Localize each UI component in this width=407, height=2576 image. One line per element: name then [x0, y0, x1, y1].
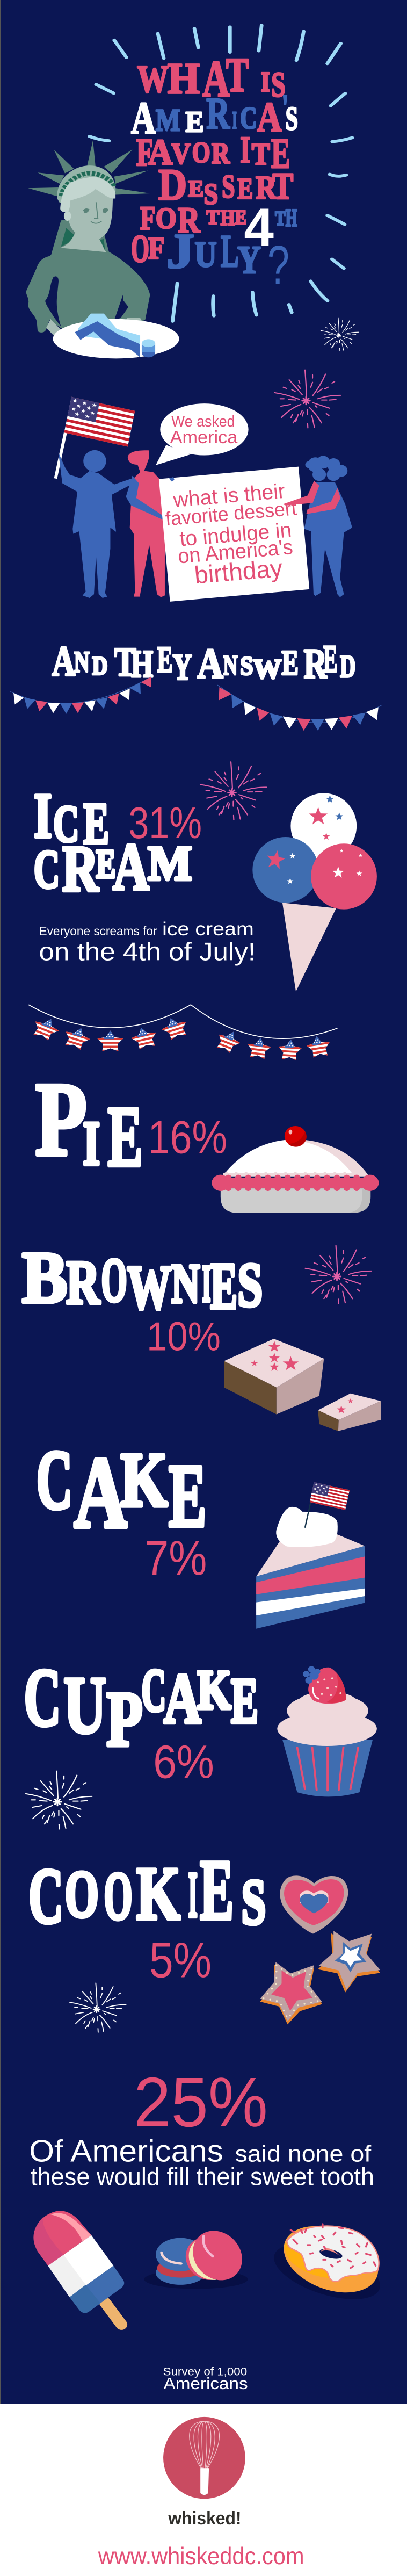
heading: pie: I — [83, 1109, 100, 1178]
panel: pie and brownies — [22, 1061, 381, 1431]
heading: brownies: B — [22, 1236, 68, 1318]
title: R — [256, 169, 277, 206]
burst rays around title — [90, 25, 352, 321]
heading: ice cream: A — [113, 829, 149, 904]
icon: macarons — [144, 2223, 252, 2289]
heading: cupcake: U — [63, 1661, 106, 1750]
heading: cupcake: K — [197, 1659, 231, 1721]
heading: ice cream: C — [53, 795, 79, 853]
heading: pie: E — [108, 1089, 143, 1185]
heading: cupcake: C — [24, 1651, 61, 1743]
bunting: right — [217, 685, 382, 731]
heading: cupcake: C — [141, 1656, 166, 1724]
heading: pie: P — [35, 1061, 87, 1178]
icon: pink firework — [200, 762, 266, 820]
icon: popsicle — [33, 2211, 124, 2325]
title: L — [221, 226, 239, 277]
title: W — [137, 57, 169, 101]
heading: cookies: I — [188, 1859, 198, 1931]
icon: white firework — [26, 1771, 92, 1829]
heading: and they answered: D — [340, 649, 355, 684]
title: I — [240, 128, 250, 171]
caption — [39, 919, 256, 966]
icon: cookies — [260, 1875, 380, 2024]
logo: whisked — [163, 2417, 245, 2529]
heading: cake: K — [121, 1437, 168, 1522]
heading: cake — [37, 1433, 206, 1549]
title: M — [156, 103, 180, 138]
stat: 25%: 25% — [134, 2063, 268, 2141]
heading: cookies: K — [136, 1851, 180, 1936]
heading: ice cream: I — [34, 781, 52, 851]
title: O — [192, 136, 210, 169]
title: T — [226, 48, 249, 102]
icon: white firework — [70, 1983, 126, 2032]
text: survey note: Americans — [164, 2374, 248, 2393]
heading: and they answered: N — [223, 650, 237, 681]
heading: cookies: C — [28, 1852, 63, 1940]
title: ? — [267, 234, 289, 295]
icon: statue of liberty with dessert plate — [26, 140, 179, 358]
sign text: favorite dessert — [164, 497, 298, 530]
title: S — [286, 100, 298, 136]
icon: cake slice — [256, 1482, 365, 1629]
title: E — [271, 129, 290, 177]
heading: brownies — [22, 1236, 263, 1323]
panel: ice cream — [26, 781, 377, 1064]
heading: and they answered: T — [114, 639, 136, 684]
heading: cake: C — [37, 1433, 72, 1527]
sign text: on America's — [177, 536, 294, 568]
title: I — [232, 106, 237, 134]
heading: and they answered: A — [197, 640, 223, 688]
heading: and they answered: N — [74, 646, 90, 679]
title: ' — [281, 87, 289, 127]
heading: and they answered: E — [281, 644, 299, 682]
heading: cupcake: P — [106, 1676, 143, 1763]
text: none of these: said none of — [235, 2141, 372, 2167]
heading: cookies: O — [104, 1858, 133, 1934]
icon: pie — [212, 1126, 379, 1213]
heading: ice cream: R — [62, 832, 99, 905]
sign text — [164, 480, 298, 589]
website url: www.whiskeddc.com — [98, 2543, 304, 2569]
title: R — [178, 200, 200, 240]
title: S — [271, 66, 286, 104]
heading: and they answered: S — [240, 651, 253, 680]
heading: ice cream — [34, 781, 192, 905]
title: Y — [237, 238, 261, 282]
title: C — [240, 100, 257, 135]
stat: 16%: 16% — [148, 1112, 227, 1164]
heading: ice cream: E — [96, 841, 115, 887]
panel: cake and cupcake — [24, 1433, 377, 1796]
icon: people holding sign and flag — [55, 397, 352, 602]
title: F — [136, 131, 153, 175]
title: T — [252, 136, 270, 171]
stat: 5%: 5% — [149, 1933, 212, 1988]
heading: and they answered: E — [323, 638, 337, 681]
heading: brownies: R — [66, 1248, 101, 1317]
text: survey note: Survey of 1,000 — [163, 2365, 247, 2378]
bunting: left — [10, 677, 151, 714]
white footer panel — [0, 2404, 407, 2576]
heading: cupcake — [24, 1651, 258, 1763]
star flag garland — [26, 1005, 337, 1064]
text: none of these: Of Americans — [29, 2134, 223, 2168]
icon: brownies — [224, 1339, 381, 1431]
title: T — [275, 207, 286, 229]
caption: on the 4th of July! — [39, 937, 256, 966]
text: none of these: these would fill their sweet tooth — [31, 2163, 374, 2191]
title: V — [171, 138, 191, 170]
title: T — [206, 206, 220, 228]
sign text: to indulge in — [179, 518, 293, 551]
heading: and they answered: Y — [172, 647, 192, 688]
title: D — [158, 160, 187, 210]
speech bubble text: America — [170, 428, 237, 448]
heading: ice cream: M — [148, 835, 192, 891]
heading: cookies: S — [242, 1866, 266, 1938]
stat: 10%: 10% — [147, 1314, 221, 1359]
icon: cupcake — [277, 1666, 377, 1796]
title: E — [188, 176, 204, 201]
title: E — [237, 172, 253, 205]
text: survey note — [163, 2365, 248, 2393]
heading: and they answered — [52, 638, 355, 688]
title: T — [273, 164, 293, 207]
heading: and they answered: A — [52, 638, 75, 685]
title: A — [202, 50, 230, 108]
sign text: what is their — [172, 480, 286, 512]
heading: cookies — [28, 1843, 266, 1940]
heading: brownies: S — [237, 1250, 263, 1320]
title: H — [168, 54, 200, 103]
title: H — [286, 204, 297, 231]
stat: 31%: 31% — [128, 798, 202, 848]
title: F — [148, 231, 165, 265]
title: S — [222, 168, 235, 205]
title: E — [186, 106, 204, 139]
sign text: birthday — [193, 554, 284, 589]
title — [131, 48, 298, 295]
caption: Everyone screams for — [39, 925, 157, 938]
caption: ice cream — [162, 919, 254, 940]
heading: ice cream: C — [34, 839, 60, 899]
heading: pie — [35, 1061, 143, 1185]
panel: cookies and none of these — [28, 1843, 380, 2191]
icon: white firework — [321, 318, 359, 351]
title: H — [221, 206, 235, 229]
heading: and they answered: W — [253, 654, 281, 684]
heading: cake: E — [169, 1446, 206, 1546]
heading: and they answered: D — [92, 651, 108, 680]
icon: ice cream cone — [252, 793, 377, 992]
title: E — [235, 206, 246, 228]
heading: brownies: N — [171, 1253, 200, 1315]
speech bubble text: We asked — [171, 413, 235, 430]
heading: and they answered: E — [157, 639, 172, 680]
heading: brownies: E — [210, 1249, 237, 1323]
heading: cake: A — [74, 1436, 127, 1549]
title: O — [131, 227, 149, 271]
title: R — [212, 138, 230, 170]
heading: cookies: O — [65, 1857, 99, 1931]
stat: 7%: 7% — [145, 1531, 207, 1585]
icon: pink firework — [306, 1246, 372, 1303]
title: A — [148, 132, 172, 172]
title: A — [131, 93, 156, 143]
heading: cupcake: E — [231, 1665, 258, 1737]
heading: brownies: O — [101, 1245, 127, 1315]
title: S — [204, 178, 218, 211]
icon: pink firework — [274, 370, 340, 428]
stat: 6%: 6% — [153, 1736, 214, 1788]
heading: brownies: I — [202, 1255, 211, 1312]
heading: ice cream: E — [83, 791, 109, 857]
text: none of these — [29, 2134, 374, 2191]
heading: and they answered: R — [304, 640, 328, 688]
title: U — [195, 234, 217, 275]
icon: donut — [266, 2213, 390, 2311]
title: O — [156, 202, 177, 235]
heading: and they answered: H — [131, 643, 153, 686]
title: 4 — [244, 198, 274, 257]
heading: cookies: E — [200, 1843, 234, 1938]
title: R — [206, 89, 230, 138]
heading: brownies: W — [127, 1253, 171, 1322]
logo: whisked: whisked! — [168, 2508, 242, 2529]
title: F — [140, 200, 156, 236]
title: I — [261, 67, 270, 97]
title: J — [166, 223, 195, 278]
title: A — [257, 93, 281, 140]
panel: other treats and footer — [33, 2211, 390, 2569]
speech bubble text — [170, 413, 237, 448]
heading: cupcake: A — [164, 1659, 201, 1738]
